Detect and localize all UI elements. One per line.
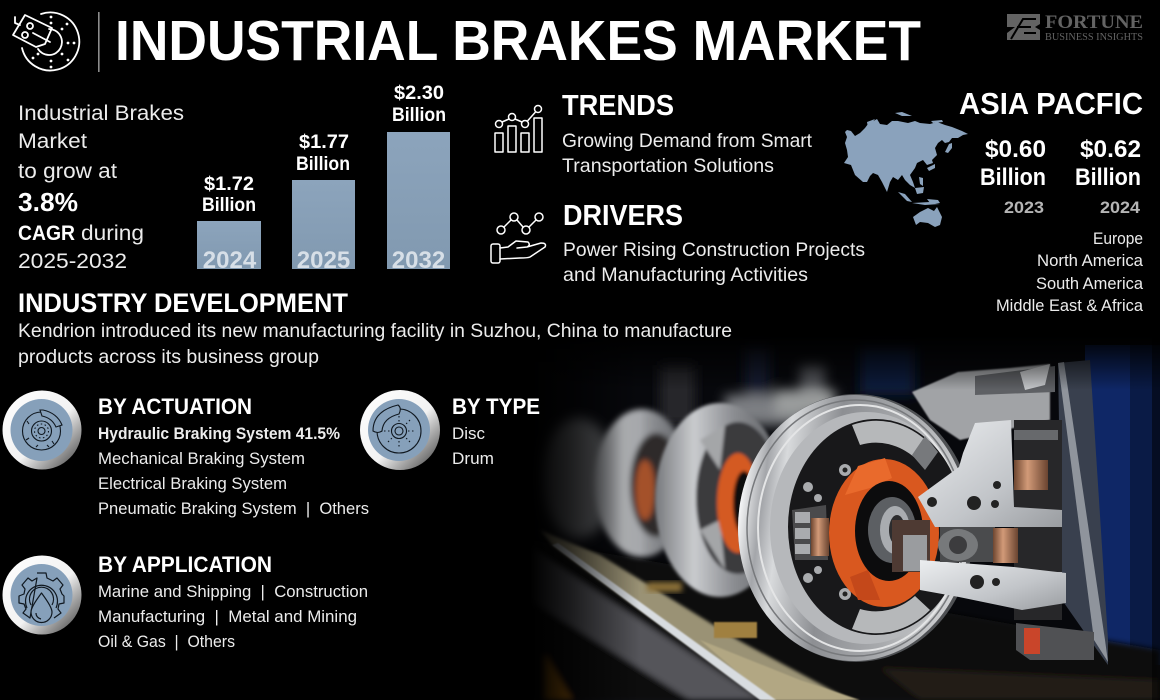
asia pacific stats: $0.60 [985, 136, 1046, 163]
industry development [18, 288, 732, 368]
bar: 2025: Billion [296, 153, 350, 175]
drivers text: and Manufacturing Activities [563, 264, 808, 286]
by type text: Drum [452, 450, 494, 468]
right plate [1058, 360, 1108, 665]
by actuation text [98, 394, 369, 518]
bar: 2025 [292, 131, 355, 274]
icon: actuation brake disc [2, 390, 82, 470]
industry development: INDUSTRY DEVELOPMENT [18, 288, 348, 318]
by type text: Disc [452, 425, 485, 443]
trends text: Transportation Solutions [562, 155, 774, 177]
asia pacific stats: ASIA PACFIC [959, 86, 1143, 121]
by type text: BY TYPE [452, 394, 540, 419]
top machine block [912, 364, 1050, 440]
bar: 2032 [387, 82, 450, 274]
caliper bracket [918, 420, 1062, 527]
icon: drivers hand [491, 213, 546, 263]
by application text [98, 552, 368, 651]
logo: Fortune Business Insights: FORTUNE [1045, 12, 1143, 33]
trends text: TRENDS [562, 90, 674, 122]
icon: trends chart [495, 106, 542, 152]
by application text: Oil & Gas | Others [98, 633, 235, 651]
photo: industrial brake machinery [530, 335, 1160, 700]
bar: 2032: $2.30 [394, 82, 444, 104]
bar chart: market size [197, 82, 450, 274]
title: INDUSTRIAL BRAKES MARKET [115, 9, 921, 73]
by application text: Marine and Shipping | Construction [98, 583, 368, 601]
bar: 2025: $1.77 [299, 131, 349, 153]
asia pacific stats: Billion [1075, 164, 1141, 191]
other regions list: North America [1037, 252, 1144, 270]
icon: application gear and drop [2, 556, 82, 634]
grey sectors [852, 421, 930, 458]
text block: CAGR summary: during [81, 221, 144, 245]
bar: 2024: Billion [202, 194, 256, 216]
text block: CAGR summary: to grow at [18, 159, 117, 183]
text block: CAGR summary: 2025-2032 [18, 249, 127, 273]
text block: CAGR summary: CAGR [18, 221, 75, 245]
fades [530, 373, 636, 700]
asia pacific stats: 2024 [1100, 198, 1141, 217]
by actuation text: Electrical Braking System [98, 475, 287, 493]
map: Asia Pacific [844, 112, 968, 227]
bar: 2024: $1.72 [204, 173, 254, 195]
logo: Fortune Business Insights [1007, 12, 1143, 43]
header icon: brake disc [13, 12, 79, 70]
trends text: Growing Demand from Smart [562, 130, 813, 152]
blurred background discs [546, 414, 607, 542]
other regions list: Europe [1093, 230, 1143, 248]
by actuation text: Mechanical Braking System [98, 450, 305, 468]
bar: 2024: 2024 [203, 247, 257, 274]
by application text: BY APPLICATION [98, 552, 272, 577]
by actuation text: BY ACTUATION [98, 394, 252, 419]
trends text [562, 90, 813, 177]
drivers text [563, 200, 865, 286]
by application text: Manufacturing | Metal and Mining [98, 608, 357, 626]
asia pacific stats: 2023 [1004, 198, 1044, 217]
dark machine column [1014, 420, 1062, 620]
industry development: products across its business group [18, 346, 319, 368]
bar: 2032: 2032 [392, 247, 445, 274]
text block: CAGR summary [18, 101, 184, 273]
by actuation text: Hydraulic Braking System 41.5% [98, 425, 340, 443]
asia pacific stats: Billion [980, 164, 1046, 191]
other regions list: South America [1036, 275, 1144, 293]
rail [543, 560, 1160, 700]
by type text [452, 394, 540, 468]
text block: CAGR summary: Market [18, 129, 87, 153]
orange ring [829, 459, 939, 607]
other regions list [996, 230, 1144, 315]
drivers text: DRIVERS [563, 200, 683, 232]
icon: type brake [360, 390, 440, 470]
blue housing [1085, 345, 1130, 648]
asia pacific stats: $0.62 [1080, 136, 1141, 163]
bar: 2032: Billion [392, 104, 446, 126]
bottom label block [1016, 623, 1094, 660]
other regions list: Middle East & Africa [996, 297, 1144, 315]
asia pacific stats [959, 86, 1143, 217]
text block: CAGR summary: 3.8% [18, 187, 78, 217]
by actuation text: Pneumatic Braking System | Others [98, 500, 369, 518]
main disc [738, 394, 974, 662]
text block: CAGR summary: Industrial Brakes [18, 101, 184, 125]
logo: Fortune Business Insights: BUSINESS INSIGHTS [1045, 32, 1143, 43]
industry development: Kendrion introduced its new manufacturing facility in Suzhou, China to manufacture [18, 320, 732, 342]
bar: 2025: 2025 [297, 247, 350, 274]
header divider [98, 12, 100, 72]
drivers text: Power Rising Construction Projects [563, 239, 865, 261]
bar: 2024 [197, 173, 261, 274]
